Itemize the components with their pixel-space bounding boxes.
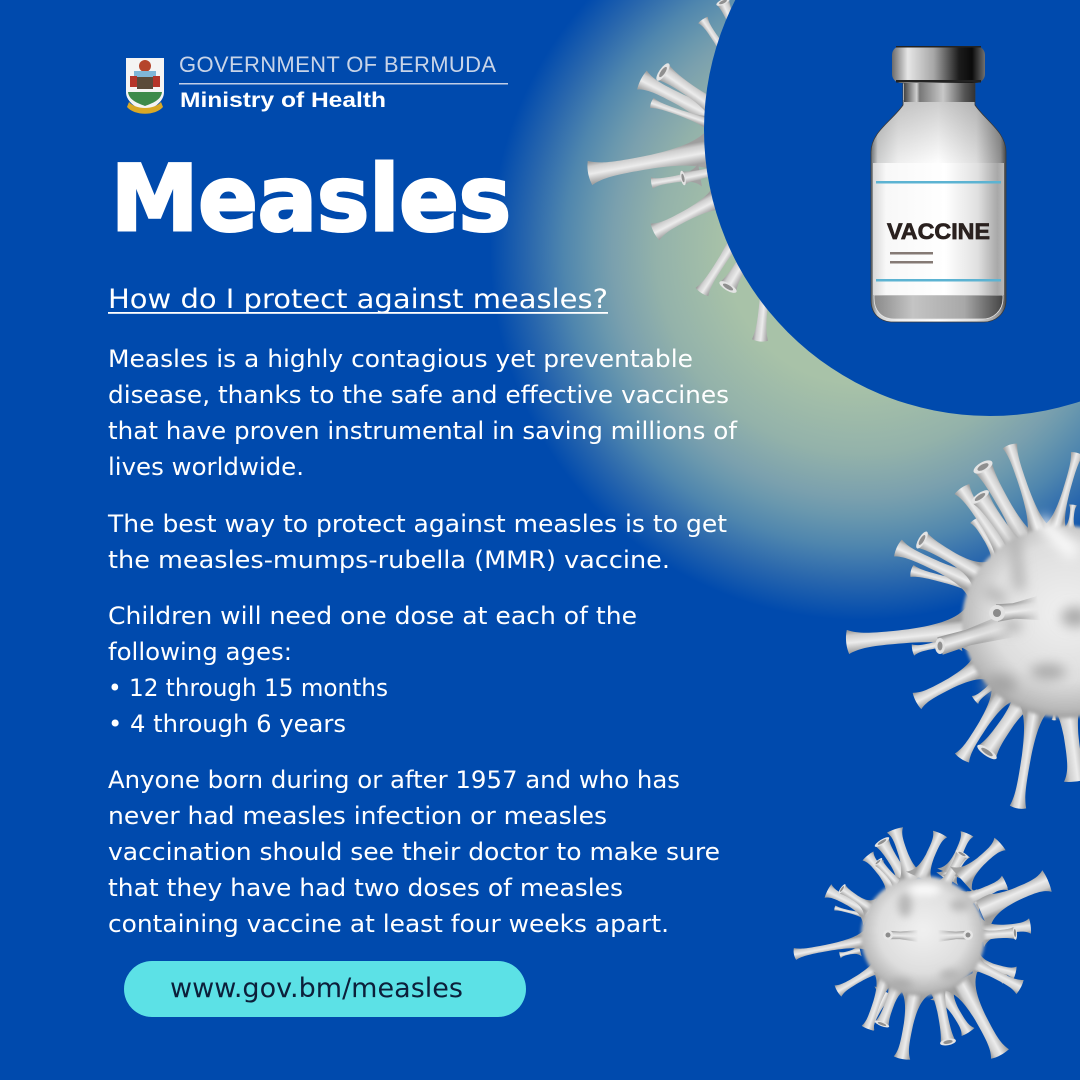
title: Measles xyxy=(111,147,511,252)
paragraph: born after 1957 xyxy=(108,766,720,938)
small virus right tube xyxy=(938,929,968,942)
paragraph: born after 1957: vaccination should see their doctor to make sure xyxy=(108,838,720,866)
vial shoulder shading xyxy=(872,100,1005,165)
ministry name: Ministry of Health xyxy=(180,89,386,112)
vaccine vial xyxy=(871,46,1006,322)
large virus front tube xyxy=(936,613,1014,658)
paragraph: MMR vaccine: the measles-mumps-rubella (MMR) vaccine. xyxy=(108,546,670,574)
vial label xyxy=(873,163,1004,295)
logo divider xyxy=(179,83,508,84)
coat of arms xyxy=(126,58,164,114)
label grey lines xyxy=(890,252,933,264)
virus: right, large xyxy=(844,440,1080,811)
small virus surface shading xyxy=(888,884,970,991)
paragraph: preventable disease: Measles is a highly contagious yet preventable xyxy=(108,345,693,373)
paragraph: born after 1957: never had measles infection or measles xyxy=(108,802,607,830)
paragraph: children doses: Children will need one dose at each of the xyxy=(108,602,637,630)
paragraph: born after 1957: that they have had two doses of measles xyxy=(108,874,623,902)
paragraph: children doses: • 12 through 15 months xyxy=(108,674,388,702)
small virus left tube xyxy=(888,929,918,942)
large virus surface shading xyxy=(984,520,1080,695)
paragraph: born after 1957: Anyone born during or after 1957 and who has xyxy=(108,766,680,794)
tube opening xyxy=(963,930,973,940)
virus: bottom right, small xyxy=(792,824,1057,1065)
label blue stripes xyxy=(876,181,1001,282)
large virus upper tube xyxy=(995,596,1041,625)
paragraph: preventable disease: lives worldwide. xyxy=(108,453,304,481)
tube opening xyxy=(989,605,1005,621)
ministry wordmark: GOVERNMENT OF BERMUDA xyxy=(179,52,496,77)
vial base xyxy=(874,295,1003,319)
paragraph: children doses: following ages: xyxy=(108,638,292,666)
vial cap xyxy=(892,46,985,83)
vial neck xyxy=(904,83,975,102)
logo: government of Bermuda xyxy=(126,52,508,114)
paragraph: MMR vaccine xyxy=(107,510,727,574)
paragraph: children doses: • 4 through 6 years xyxy=(108,710,346,738)
paragraph: preventable disease xyxy=(108,345,738,481)
paragraph: MMR vaccine: The best way to protect against measles is to get xyxy=(107,510,727,538)
label word: VACCINE xyxy=(887,219,990,244)
tube opening xyxy=(935,638,945,654)
paragraph: children doses xyxy=(108,602,637,738)
glow behind virus and vaccine circle xyxy=(0,0,1080,700)
vial glass xyxy=(871,83,1006,322)
paragraph: born after 1957: containing vaccine at least four weeks apart. xyxy=(108,910,669,938)
website button: www.gov.bm/measles xyxy=(170,973,463,1004)
tube opening xyxy=(883,930,893,940)
website button xyxy=(124,961,526,1017)
paragraph: preventable disease: disease, thanks to the safe and effective vaccines xyxy=(108,381,729,409)
vaccine circle xyxy=(704,0,1080,416)
virus: top left, partly hidden by circle xyxy=(584,0,890,343)
paragraph: preventable disease: that have proven instrumental in saving millions of xyxy=(108,417,738,445)
subheading: How do I protect against measles? xyxy=(108,284,608,315)
